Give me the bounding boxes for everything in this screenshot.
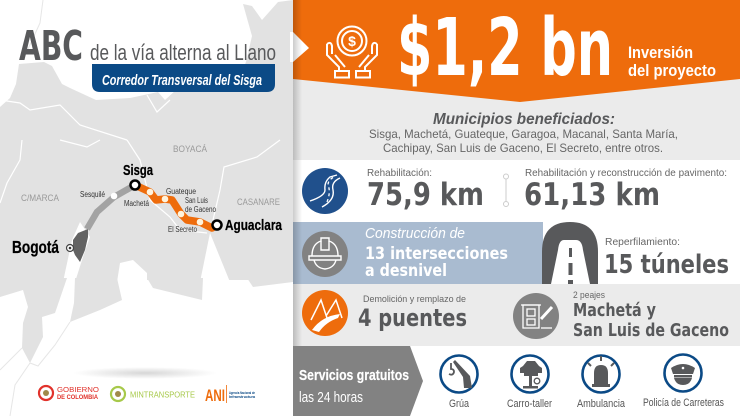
route map [12, 163, 283, 262]
icon: workshop car [512, 356, 548, 392]
road section orange [135, 185, 217, 228]
main place labels [12, 163, 283, 257]
stat: intersections: Construcción de [365, 226, 465, 242]
title [19, 22, 276, 70]
stat: tolls: Machetá y [573, 300, 656, 321]
icon: helmet and gear [302, 231, 348, 277]
stat: intersections: a desnivel [365, 261, 447, 280]
stat: bridges [358, 294, 467, 332]
town labels: Guateque [166, 187, 196, 196]
stat: rehabilitation [367, 168, 484, 213]
icon: tunnel [542, 222, 598, 284]
municipalities text: Sisga, Machetá, Guateque, Garagoa, Macanal, Santa María, [369, 127, 678, 141]
stat: rehabilitation: Rehabilitación: [367, 168, 432, 179]
stat: tunnels: Reperfilamiento: [605, 237, 680, 248]
service labels: Ambulancia [577, 398, 626, 410]
logo: Gobierno de Colombia [39, 386, 100, 401]
stat: pavement: 61,13 km [524, 177, 660, 213]
stat: rehabilitation: 75,9 km [367, 177, 484, 213]
region labels [21, 144, 280, 207]
main place labels: Aguaclara [225, 218, 283, 234]
service labels: Carro-taller [507, 398, 552, 410]
panel: map [0, 0, 293, 416]
stat: tunnels [604, 237, 729, 280]
stat: pavement [524, 168, 727, 213]
logos [39, 385, 255, 405]
amount label: del proyecto [628, 62, 716, 80]
panel: investment [293, 0, 740, 102]
region labels: C/MARCA [21, 193, 59, 203]
subtitle banner: Corredor Transversal del Sisga [102, 72, 262, 89]
icon: siren [582, 356, 620, 392]
logo: ANI: Agencia Nacional de [229, 391, 255, 395]
amount label: Inversión [628, 44, 693, 62]
icon: road [302, 168, 348, 214]
service labels [449, 397, 724, 410]
stat: intersections [365, 226, 508, 280]
town labels: San Luis [185, 196, 208, 205]
panel notch arrow [290, 32, 309, 62]
logo: Mintransporte: MINTRANSPORTE [130, 390, 195, 400]
icon: hands with coin: $ [348, 33, 356, 49]
town labels: de Gaceno [185, 205, 216, 214]
stat: bridges: Demolición y remplazo de [363, 294, 466, 305]
logo: Gobierno de Colombia: GOBIERNO [57, 387, 100, 394]
municipalities text [369, 111, 678, 155]
stat: pavement: Rehabilitación y reconstrucción de pavimento: [525, 168, 727, 179]
main place labels: Sisga [123, 163, 154, 179]
separator [504, 174, 508, 206]
town labels: Sesquilé [80, 190, 105, 199]
municipalities text: Municipios beneficiados: [433, 111, 615, 128]
stat: bridges: 4 puentes [358, 304, 467, 332]
Bogotá urban area [73, 229, 88, 262]
icon: bridge [302, 290, 348, 336]
icon: police cap [664, 354, 702, 392]
route stops [66, 180, 222, 252]
stat: tolls [573, 290, 729, 341]
icon: hands with coin [327, 26, 377, 78]
title: de la vía alterna al Llano [90, 40, 276, 65]
services arrow [293, 346, 423, 416]
subtitle banner [92, 64, 275, 92]
logo: ANI: Infraestructura [229, 395, 255, 399]
logo shadow [73, 367, 217, 379]
main place labels: Bogotá [12, 237, 59, 257]
services arrow: las 24 horas [299, 389, 363, 406]
town labels: El Secreto [168, 225, 197, 234]
amount: $1,2 bn [397, 2, 613, 94]
town labels: Machetá [124, 199, 149, 208]
region labels: CASANARE [237, 197, 280, 207]
logo: ANI [205, 385, 255, 405]
panel left shadow [293, 0, 302, 416]
services arrow: Servicios gratuitos [299, 367, 409, 384]
title: ABC [19, 22, 83, 70]
municipalities text: Cachipay, San Luis de Gaceno, El Secreto, entre otros. [383, 141, 663, 155]
service labels: Grúa [449, 398, 470, 410]
icon: toll booth [513, 293, 559, 339]
logo: ANI: ANI [205, 386, 225, 405]
stat: intersections: 13 intersecciones [365, 244, 508, 263]
logo: Mintransporte [111, 387, 195, 401]
icon: tow truck [440, 356, 478, 392]
stat: tolls: 2 peajes [573, 290, 605, 300]
road section gray [87, 185, 135, 229]
town labels [80, 187, 216, 234]
panel: right background rows [293, 60, 740, 416]
region labels: BOYACÁ [173, 144, 207, 154]
logo: Gobierno de Colombia: DE COLOMBIA [57, 395, 99, 401]
amount label [628, 44, 716, 80]
